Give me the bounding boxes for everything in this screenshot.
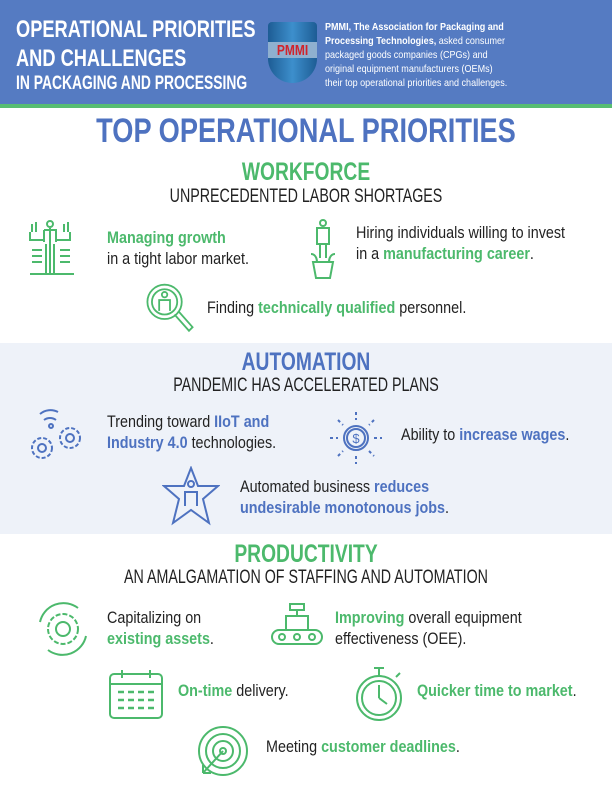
text: hiring: Hiring individuals willing to invest [356, 224, 565, 242]
intro text: their top operational priorities and challenges. [325, 77, 507, 89]
title: IN PACKAGING AND PROCESSING [16, 73, 247, 94]
icon: stopwatch [356, 667, 402, 721]
main heading: TOP OPERATIONAL PRIORITIES [96, 112, 516, 150]
text: IIoT: Trending toward IIoT and [107, 413, 269, 431]
icon: dollar: $ [352, 431, 360, 446]
icon: growth person [29, 220, 74, 275]
section: productivity [39, 540, 577, 776]
text: IIoT: Industry 4.0 technologies. [107, 434, 276, 452]
logo: PMMI [268, 22, 317, 83]
text: hiring: in a manufacturing career. [356, 245, 534, 263]
section: workforce: UNPRECEDENTED LABOR SHORTAGES [170, 186, 442, 207]
text: automated business: Automated business reduces [240, 478, 429, 496]
text: OEE: effectiveness (OEE). [335, 630, 466, 648]
text: assets [107, 609, 214, 648]
text: assets: Capitalizing on [107, 609, 201, 627]
title: AND CHALLENGES [16, 45, 186, 72]
icon: gears wifi [31, 409, 81, 459]
text: hiring [356, 224, 565, 263]
icon: conveyor [271, 603, 323, 645]
text: on-time: On-time delivery. [178, 682, 289, 700]
icon: calendar [109, 670, 163, 719]
intro text: Processing Technologies, asked consumer [325, 35, 505, 47]
text: automated business [240, 478, 449, 517]
title [16, 16, 256, 94]
heading productivity: PRODUCTIVITY [234, 540, 378, 568]
icon: dollar [330, 412, 382, 464]
heading automation: AUTOMATION [242, 348, 370, 376]
text: wages: Ability to increase wages. [401, 426, 569, 444]
text: managing growth: in a tight labor market. [107, 250, 249, 268]
intro text [325, 21, 507, 89]
icon: magnifier [146, 284, 194, 332]
text: OEE [335, 609, 522, 648]
title: OPERATIONAL PRIORITIES [16, 16, 256, 43]
intro text: PMMI, The Association for Packaging and [325, 21, 504, 33]
icon: star person [162, 466, 220, 526]
icon: person plant [311, 219, 335, 279]
text: automated business: undesirable monotonous jobs. [240, 499, 449, 517]
text: finding: Finding technically qualified personnel. [207, 299, 466, 317]
section: productivity: AN AMALGAMATION OF STAFFING AND AUTOMATION [124, 567, 488, 588]
text: assets: existing assets. [107, 630, 214, 648]
heading workforce: WORKFORCE [242, 158, 370, 186]
section: workforce [29, 158, 565, 332]
text: managing growth [107, 229, 249, 268]
intro text: original equipment manufacturers (OEMs) [325, 63, 493, 75]
intro text: packaged goods companies (CPGs) and [325, 49, 488, 61]
icon: target [198, 726, 248, 776]
section: automation [31, 348, 569, 526]
header panel [0, 0, 612, 104]
text: IIoT [107, 413, 276, 452]
automation band [0, 343, 612, 534]
text: managing growth: Managing growth [107, 229, 226, 247]
text: deadlines: Meeting customer deadlines. [266, 738, 460, 756]
logo: PMMI: PMMI [277, 42, 308, 59]
text: OEE: Improving overall equipment [335, 609, 522, 627]
text: quicker: Quicker time to market. [417, 682, 577, 700]
section: automation: PANDEMIC HAS ACCELERATED PLANS [173, 375, 439, 396]
icon: gear cycle [39, 602, 87, 656]
